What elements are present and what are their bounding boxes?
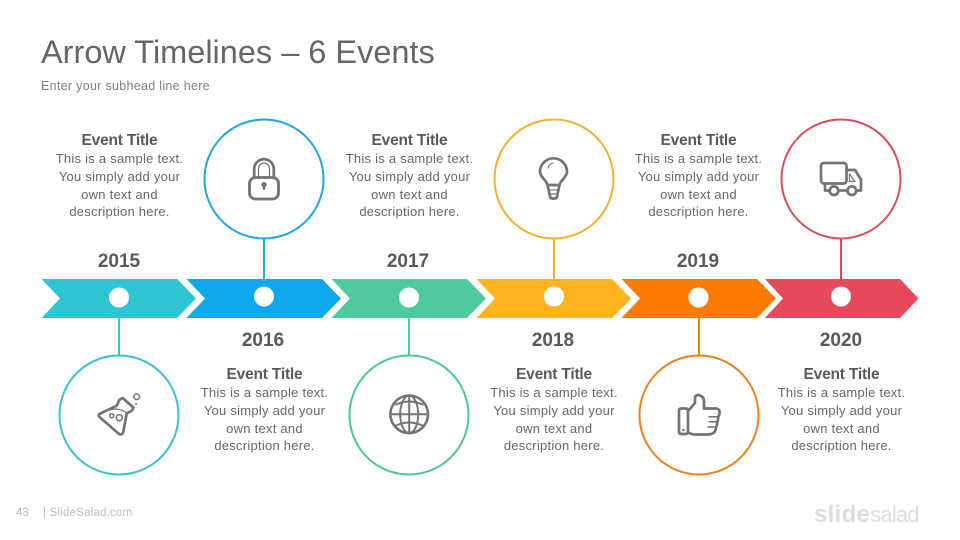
icon: padlock (250, 159, 278, 199)
text: 2016 event: Event Title (227, 366, 302, 383)
text: 2015 event: You simply add your (59, 169, 180, 184)
text: 2019 event: This is a sample text. (635, 151, 762, 166)
text: 2016 event (201, 366, 328, 453)
year 2018: 2018 (532, 330, 574, 351)
text: 2019 event: Event Title (661, 132, 736, 149)
text: 2019 event: You simply add your (638, 169, 759, 184)
icon: thumbs up (679, 395, 720, 434)
subhead: Enter your subhead line here (41, 79, 210, 93)
text: 2015 event: Event Title (82, 132, 157, 149)
text: 2016 event: description here. (214, 438, 315, 453)
text: 2015 event: description here. (69, 204, 170, 219)
page number: 43 (16, 507, 29, 519)
text: 2017 event: own text and (371, 187, 448, 202)
text: 2020 event: You simply add your (781, 403, 902, 418)
timeline dots (109, 286, 851, 308)
text: 2017 event: description here. (359, 204, 460, 219)
text: 2019 event: own text and (660, 187, 737, 202)
text: 2020 event: This is a sample text. (778, 385, 905, 400)
text: 2019 event: description here. (648, 204, 749, 219)
text: 2017 event (346, 132, 473, 219)
text: 2017 event: You simply add your (349, 169, 470, 184)
icon: light bulb (540, 158, 567, 198)
text: 2020 event: description here. (791, 438, 892, 453)
year 2015: 2015 (98, 251, 140, 272)
year 2016: 2016 (242, 330, 284, 351)
year 2020: 2020 (820, 330, 862, 351)
text: 2018 event: description here. (504, 438, 604, 453)
text: 2017 event: Event Title (372, 132, 447, 149)
icon circles (60, 120, 900, 474)
logo wordmark: slidesalad (814, 501, 919, 528)
text: 2016 event: You simply add your (204, 403, 325, 418)
icon: flask (99, 394, 140, 434)
text: 2018 event: own text and (516, 421, 592, 436)
text: 2018 event: You simply add your (493, 403, 615, 418)
year 2019: 2019 (677, 251, 719, 272)
text: 2015 event: This is a sample text. (56, 151, 183, 166)
text: 2020 event: Event Title (804, 366, 879, 383)
year 2017: 2017 (387, 251, 429, 272)
icon: globe (390, 396, 428, 433)
text: 2020 event: own text and (803, 421, 880, 436)
arrow segments (42, 279, 918, 318)
title: Arrow Timelines – 6 Events (41, 34, 435, 70)
text: 2018 event: Event Title (516, 366, 592, 383)
footer source: | SlideSalad.com (43, 507, 132, 519)
text: 2018 event (490, 366, 618, 453)
text: 2020 event (778, 366, 905, 453)
text: 2019 event (635, 132, 762, 219)
text: 2015 event: own text and (81, 187, 158, 202)
icon: delivery truck (821, 163, 861, 195)
text: 2015 event (56, 132, 183, 219)
text: 2016 event: This is a sample text. (201, 385, 328, 400)
connector lines (119, 238, 841, 356)
text: 2018 event: This is a sample text. (490, 385, 618, 400)
text: 2017 event: This is a sample text. (346, 151, 473, 166)
text: 2016 event: own text and (226, 421, 303, 436)
